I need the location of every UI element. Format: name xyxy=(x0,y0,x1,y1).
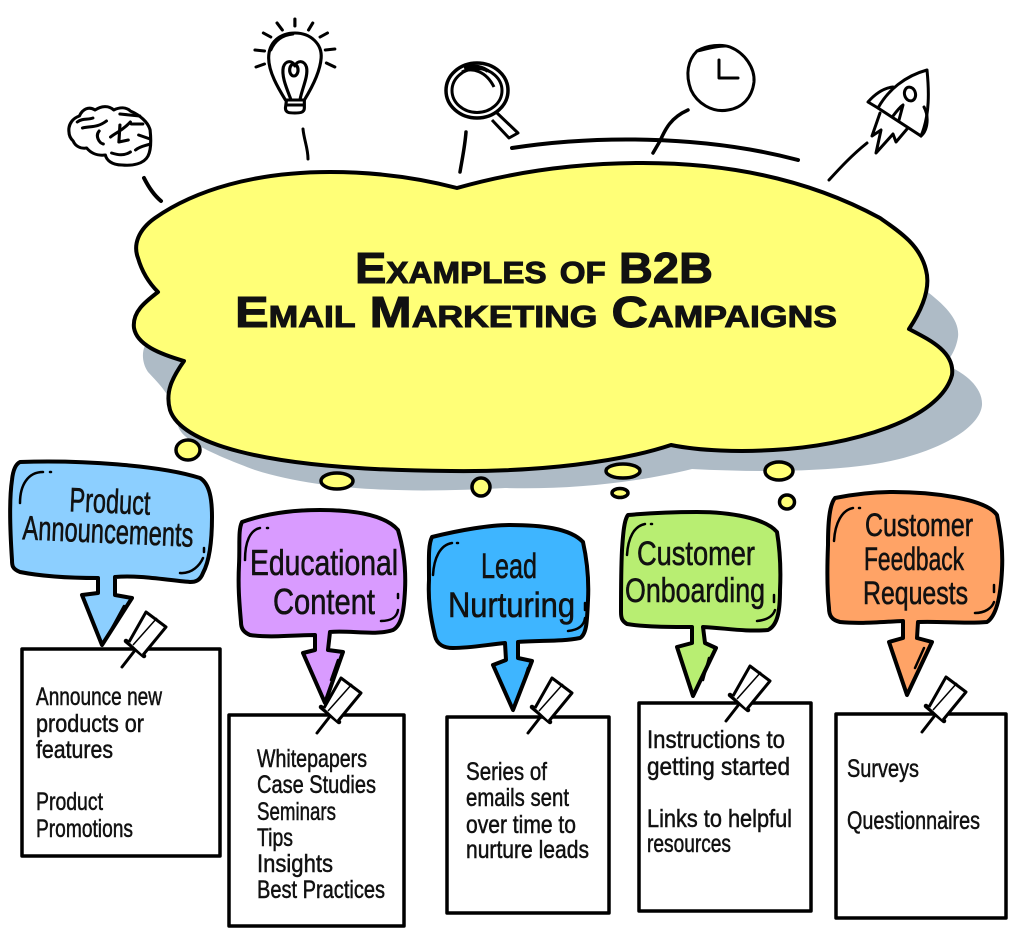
speech bubble: Product Announcements: Announcements xyxy=(22,509,194,555)
note card: Customer Onboarding: getting started xyxy=(647,753,790,781)
icon: rocket xyxy=(868,70,928,153)
connector: brain xyxy=(144,178,161,201)
speech bubble: Customer Feedback Requests: Customer xyxy=(865,507,973,543)
speech bubble: Lead Nurturing xyxy=(429,525,588,710)
note card: Lead Nurturing: over time to xyxy=(466,811,576,839)
note card: Product Announcements: Announce new xyxy=(36,683,163,711)
note card: Educational Content: Case Studies xyxy=(257,771,376,799)
note card: Educational Content xyxy=(229,715,404,926)
speech bubble: Customer Feedback Requests: Feedback xyxy=(864,541,965,577)
connector: clock xyxy=(653,110,688,153)
note card: Customer Onboarding: Instructions to xyxy=(647,726,785,754)
thought dots xyxy=(176,440,794,509)
icon: light bulb xyxy=(255,19,335,113)
note card: Educational Content: Insights xyxy=(257,850,333,878)
connector: magnifier xyxy=(460,132,466,172)
arc stroke xyxy=(512,139,798,160)
note card: Educational Content: Whitepapers xyxy=(257,745,367,773)
title: Examples of B2B xyxy=(355,244,713,293)
note card: Educational Content: Best Practices xyxy=(257,876,385,904)
icon: brain xyxy=(69,107,151,165)
icon: magnifier xyxy=(446,63,518,138)
note card: Customer Feedback Requests: Questionnaires xyxy=(847,807,980,835)
note card: Educational Content: Tips xyxy=(257,824,293,852)
speech bubble: Customer Feedback Requests xyxy=(827,492,1002,695)
speech bubble: Customer Feedback Requests: Requests xyxy=(863,575,968,611)
note card: Customer Onboarding xyxy=(639,703,811,911)
cloud shadow xyxy=(143,290,982,490)
icon: pin card 3 xyxy=(528,678,572,733)
speech bubble: Educational Content: Educational xyxy=(250,542,398,583)
note card: Lead Nurturing: Series of xyxy=(466,758,547,786)
icon: pin card 5 xyxy=(922,677,966,732)
icon: pin card 2 xyxy=(317,678,361,733)
note card: Product Announcements xyxy=(22,649,220,856)
note card: Product Announcements: Product xyxy=(36,788,103,816)
note card: Product Announcements: features xyxy=(36,736,113,764)
note card: Customer Feedback Requests xyxy=(836,714,1006,918)
note card: Customer Onboarding: resources xyxy=(647,830,731,858)
note card: Educational Content: Seminars xyxy=(257,798,336,826)
speech bubble: Educational Content xyxy=(239,510,405,703)
note card: Lead Nurturing: nurture leads xyxy=(466,836,589,864)
connector: bulb xyxy=(303,129,308,159)
icon: pin card 4 xyxy=(726,666,770,721)
note card: Product Announcements: products or xyxy=(36,710,144,738)
icon: pin card 1 xyxy=(122,612,166,667)
note card: Customer Feedback Requests: Surveys xyxy=(847,755,919,783)
speech bubble: Product Announcements xyxy=(10,462,212,645)
speech bubble: Product Announcements: Product xyxy=(69,481,152,523)
note card: Product Announcements: Promotions xyxy=(36,815,133,843)
speech cloud xyxy=(134,163,952,471)
speech bubble: Customer Onboarding: Onboarding xyxy=(625,572,765,610)
title xyxy=(235,244,837,337)
connector: rocket xyxy=(829,143,867,180)
title: Email Marketing Campaigns xyxy=(235,288,837,337)
icon: clock xyxy=(688,45,754,111)
speech bubble: Lead Nurturing: Lead xyxy=(481,547,537,586)
speech bubble: Educational Content: Content xyxy=(273,581,375,622)
note card: Customer Onboarding: Links to helpful xyxy=(647,805,792,833)
note card: Lead Nurturing: emails sent xyxy=(466,784,569,812)
note card: Lead Nurturing xyxy=(447,717,609,913)
speech bubble: Lead Nurturing: Nurturing xyxy=(448,586,575,625)
speech bubble: Customer Onboarding xyxy=(621,512,780,696)
speech bubble: Customer Onboarding: Customer xyxy=(637,535,755,573)
